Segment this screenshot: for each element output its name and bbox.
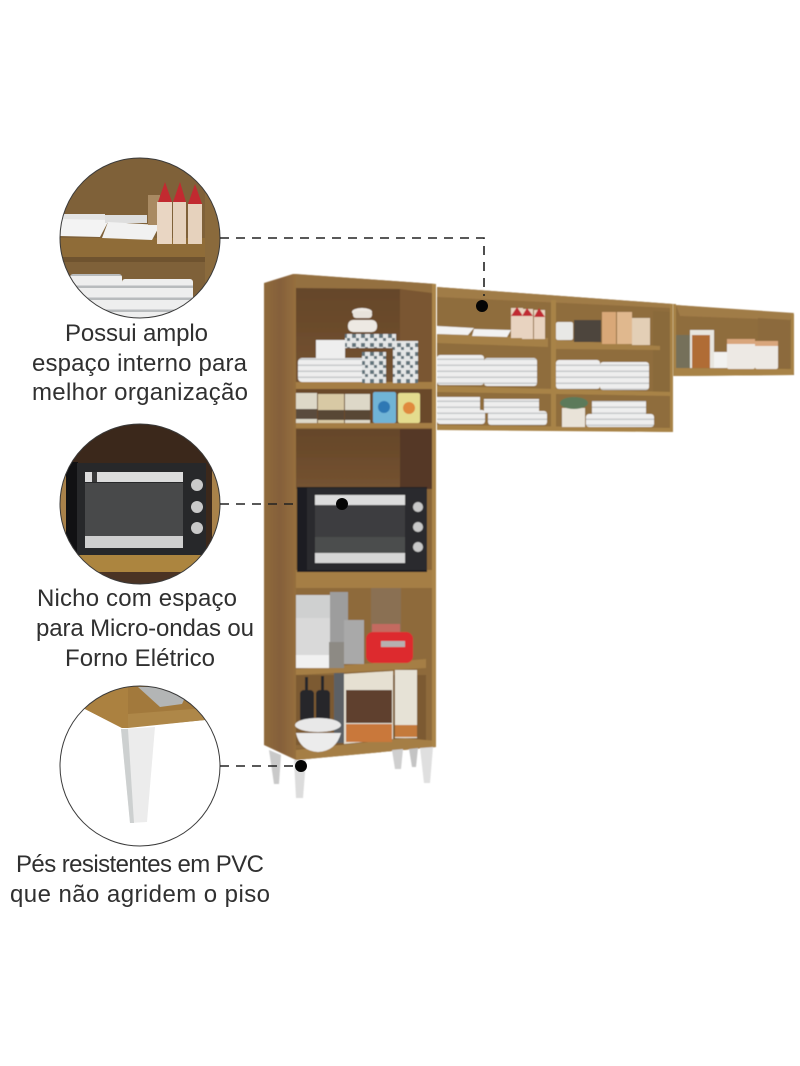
caption: PVC feet: Pés resistentes em PVC	[16, 851, 264, 878]
electric oven	[297, 487, 427, 572]
callout circle: interior space	[58, 158, 220, 318]
caption: oven niche	[36, 585, 254, 672]
plate stacks and plant, lower shelf	[437, 397, 654, 427]
cabinet body	[293, 274, 436, 760]
caption: oven niche: para Micro-ondas ou	[36, 615, 254, 642]
caption: interior space: melhor organização	[32, 379, 248, 406]
leader line: interior space	[220, 238, 488, 312]
callout circle: PVC feet	[60, 680, 220, 846]
dishes and canisters, top shelf	[298, 308, 418, 383]
wall unit: right small cabinet	[673, 304, 794, 376]
lower back panel	[296, 588, 432, 748]
jars, second shelf	[296, 392, 420, 423]
middle back panel	[296, 429, 432, 489]
caption: PVC feet	[10, 851, 270, 908]
shelves	[296, 382, 436, 760]
caption: PVC feet: que não agridem o piso	[10, 881, 270, 908]
wall unit: double cabinet with plates	[437, 287, 673, 432]
callout circle: oven niche	[60, 424, 220, 584]
leader line: PVC feet	[220, 760, 307, 772]
tall cabinet	[264, 274, 436, 798]
caption: interior space	[32, 320, 248, 406]
caption: interior space: espaço interno para	[32, 350, 248, 377]
jars on the right cabinet	[676, 330, 778, 369]
bottles, books and bowls	[295, 670, 417, 752]
left side panel	[264, 274, 296, 760]
caption: oven niche: Forno Elétrico	[65, 645, 215, 672]
plate stacks, middle shelf	[437, 355, 649, 390]
caption: interior space: Possui amplo	[65, 320, 208, 347]
plates and bowls, upper shelf	[437, 307, 650, 345]
caption: oven niche: Nicho com espaço	[37, 585, 237, 612]
cabinet legs	[269, 747, 433, 798]
upper back panel	[296, 288, 401, 383]
small appliances	[296, 588, 413, 668]
leader line: oven niche	[220, 498, 348, 510]
